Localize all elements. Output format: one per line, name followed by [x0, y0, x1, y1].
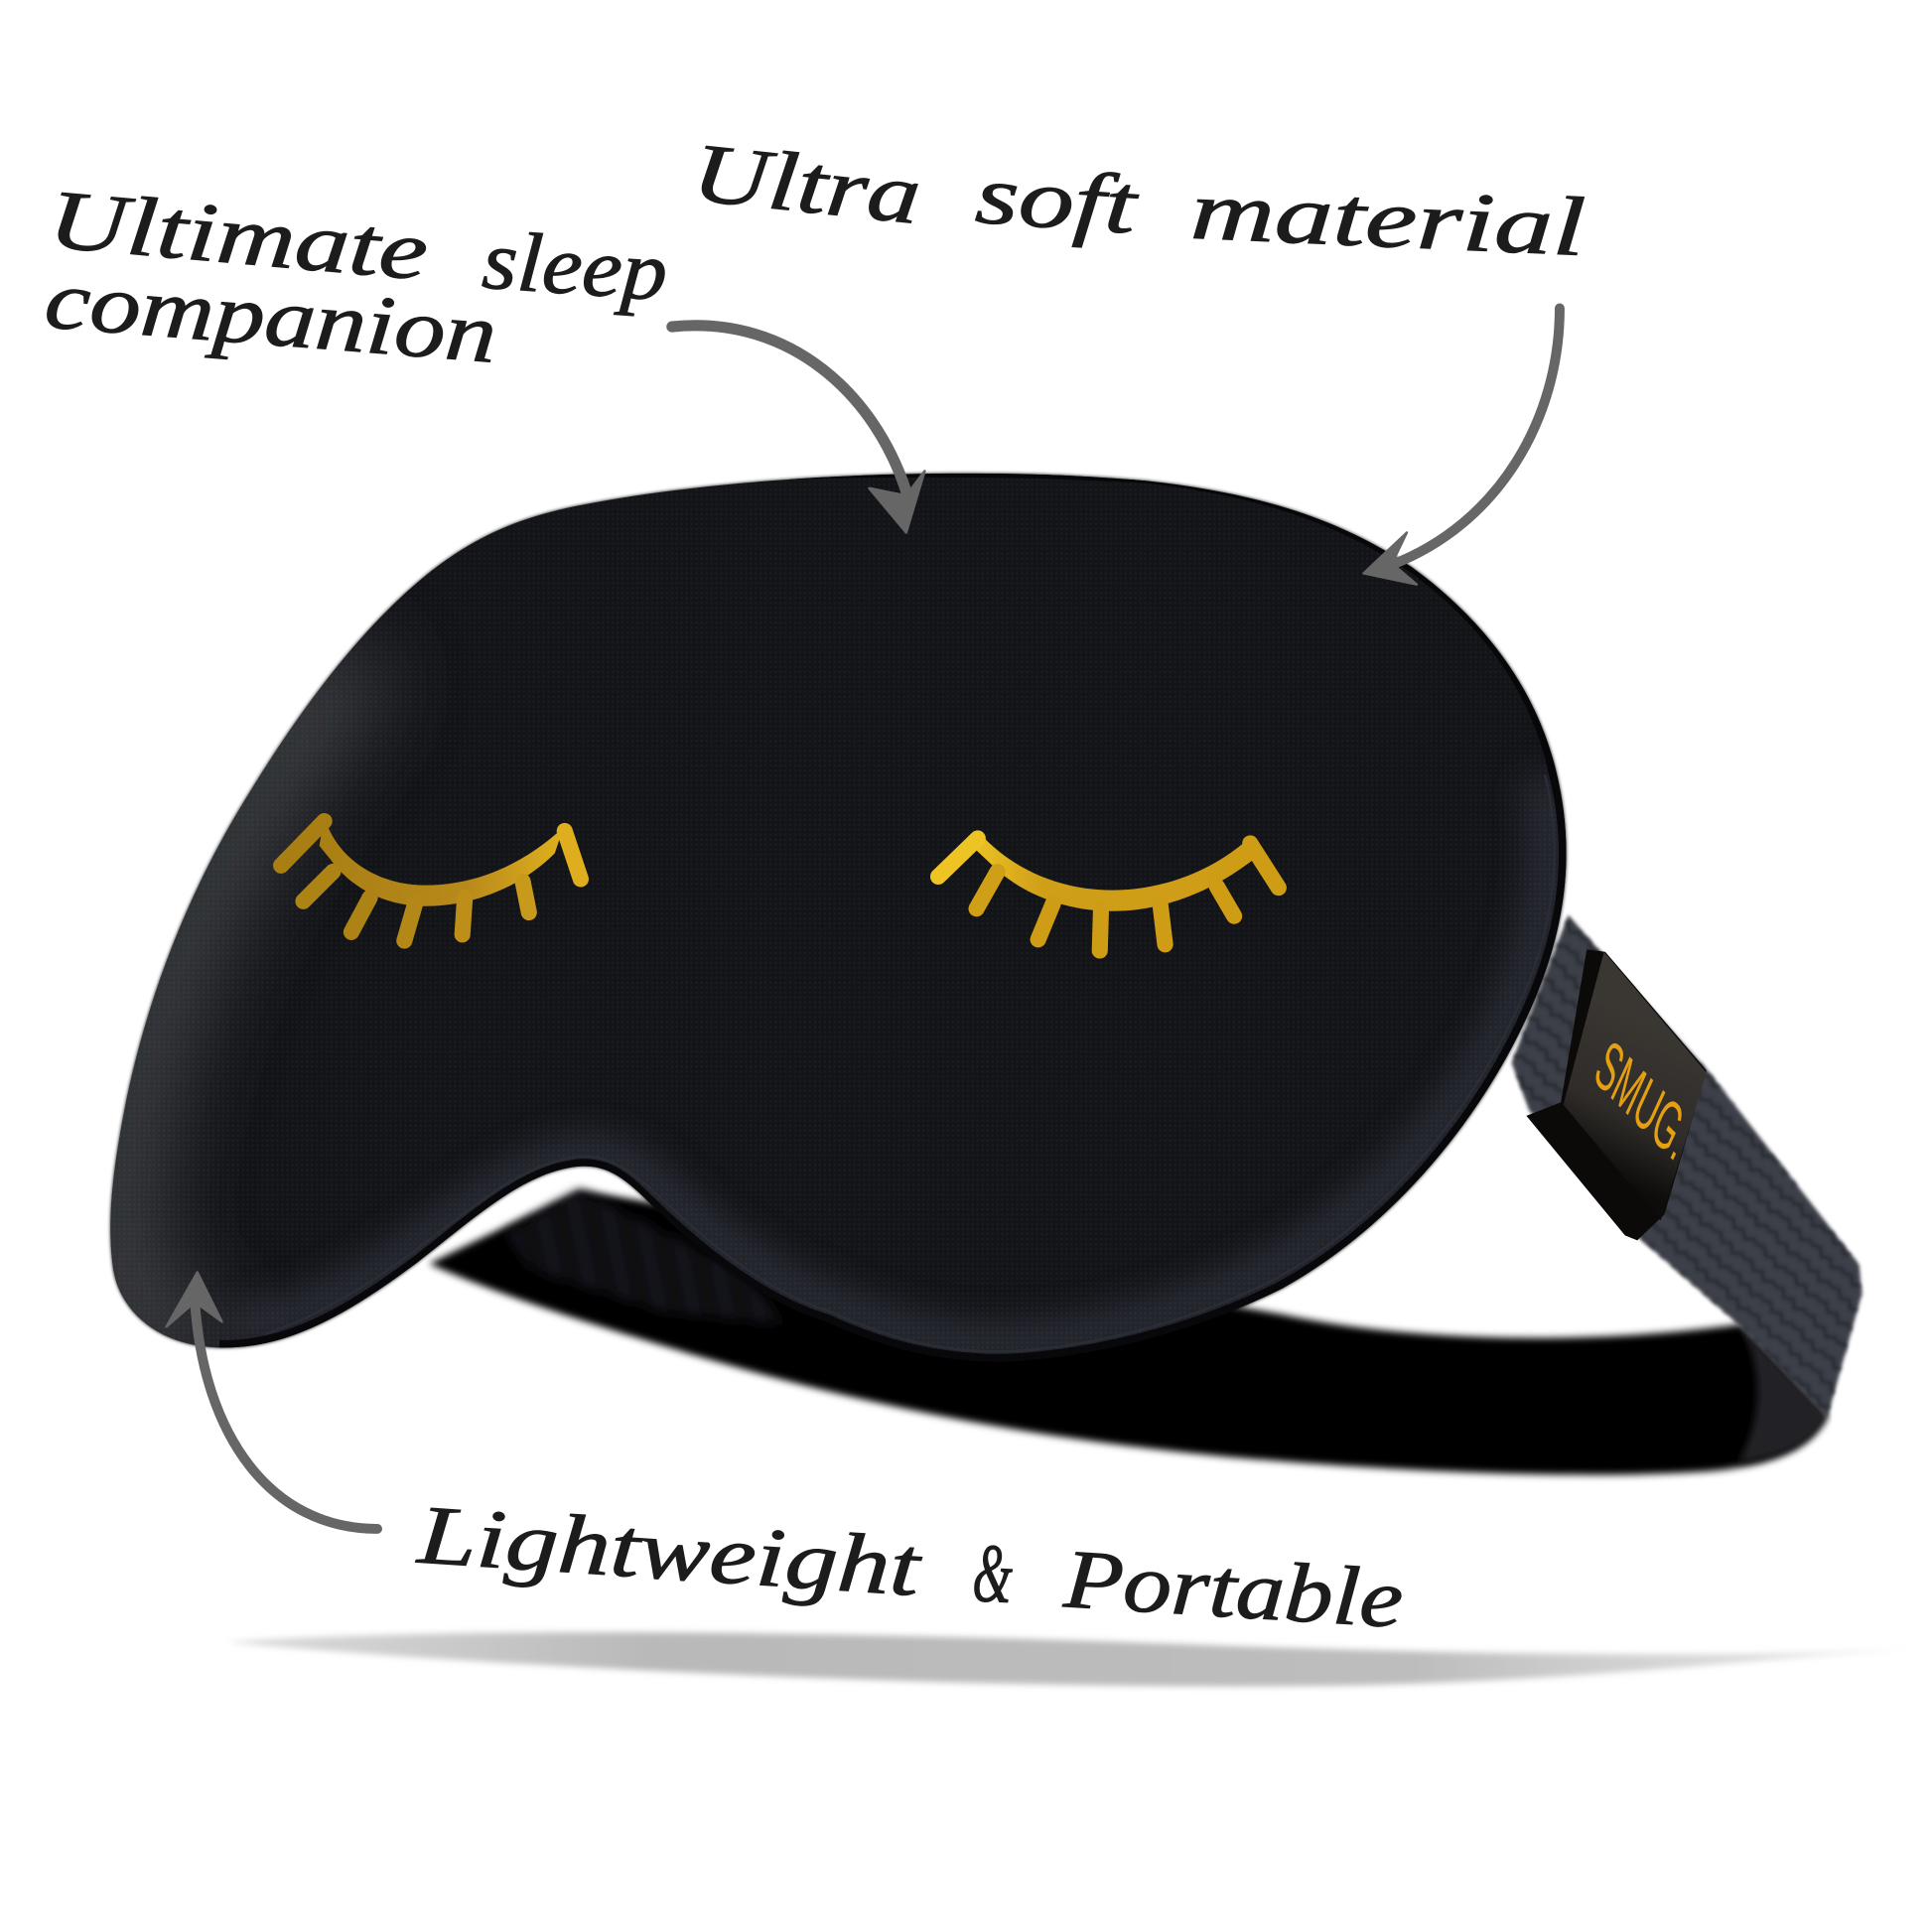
back strap	[429, 1189, 1827, 1474]
label: ultra soft material	[688, 127, 1587, 274]
rim	[219, 473, 1564, 1359]
label: ultimate sleep companion: companion	[42, 253, 500, 381]
brand name: SMUG.	[1586, 1025, 1701, 1175]
label: ultra soft material: soft	[973, 149, 1143, 252]
strap label	[1526, 949, 1707, 1240]
left closed eye	[281, 816, 581, 941]
arrow: lightweight and portable	[167, 1273, 377, 1529]
side strap	[1512, 914, 1862, 1418]
label: ultimate sleep companion	[42, 174, 670, 381]
label: ultra soft material: Ultra	[688, 127, 925, 242]
eyelid arc	[320, 816, 564, 906]
right closed eye	[938, 831, 1279, 950]
mask body	[107, 471, 1569, 1362]
label: lightweight and portable: Portable	[1060, 1533, 1406, 1646]
label: ultra soft material: material	[1189, 165, 1587, 274]
ground shadow	[225, 1632, 1923, 1687]
eyelid arc	[972, 831, 1255, 911]
label: lightweight and portable: &	[971, 1527, 1015, 1621]
infographic canvas	[47, 145, 1864, 1690]
label: lightweight and portable: Lightweight	[414, 1489, 925, 1614]
arrow: ultra soft material	[1364, 308, 1560, 585]
lower sheen	[234, 776, 1549, 1344]
left edge sheen	[110, 653, 357, 1344]
label: ultimate sleep companion: sleep	[480, 214, 670, 319]
arrow: ultimate sleep companion	[672, 326, 924, 532]
label: ultimate sleep companion: Ultimate	[46, 174, 432, 299]
label: lightweight and portable	[414, 1489, 1406, 1646]
